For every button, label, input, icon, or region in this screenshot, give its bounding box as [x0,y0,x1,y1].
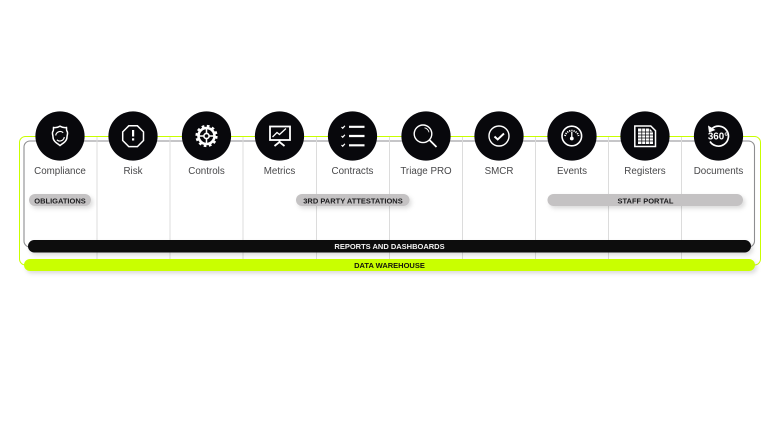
module: Controls: Controls [188,166,225,177]
module: Contracts [328,111,377,177]
icon: check circle [489,126,509,146]
pill: obligations: OBLIGATIONS [34,196,86,205]
bar: data warehouse: DATA WAREHOUSE [354,261,425,270]
inner grey outline [24,141,754,247]
module: Documents [694,111,743,177]
bar: reports and dashboards [28,240,751,252]
module: Metrics [255,111,304,177]
icon: shield badge [52,126,68,146]
bar: data warehouse [24,259,755,271]
icon: gauge [562,126,582,146]
module: Metrics: Metrics [264,166,295,177]
module: Registers [620,111,670,177]
module: Documents: Documents [694,166,743,177]
icon: gear [197,126,216,146]
pill: obligations [29,194,91,206]
module: Risk [108,111,158,177]
module: Compliance [34,111,86,177]
icon: checklist [342,126,364,146]
module: Risk: Risk [123,166,143,177]
module: Registers: Registers [624,166,666,177]
icon: presentation board [270,126,290,146]
pill: staff portal [548,194,743,206]
module: Controls [182,111,231,177]
module: Events [547,111,597,177]
module: SMCR: SMCR [485,166,513,177]
module: Triage PRO [400,111,452,177]
module: Triage PRO: Triage PRO [400,166,452,177]
icon: spreadsheet [635,126,656,146]
bar: reports and dashboards: REPORTS AND DASHBOARDS [334,242,445,251]
module: Events: Events [557,166,587,177]
column dividers [97,137,682,259]
module: Compliance: Compliance [34,166,86,177]
pill: staff portal: STAFF PORTAL [618,196,674,205]
icon: magnifier [414,125,436,147]
module: SMCR [474,111,524,177]
pill: 3rd party attestations [296,194,410,206]
pill: 3rd party attestations: 3RD PARTY ATTESTATIONS [303,196,403,205]
outer lime outline [20,136,760,265]
icon: warning octagon [123,126,144,147]
module: Contracts: Contracts [332,166,374,177]
icon: 360 rotation: 360° [708,132,728,142]
